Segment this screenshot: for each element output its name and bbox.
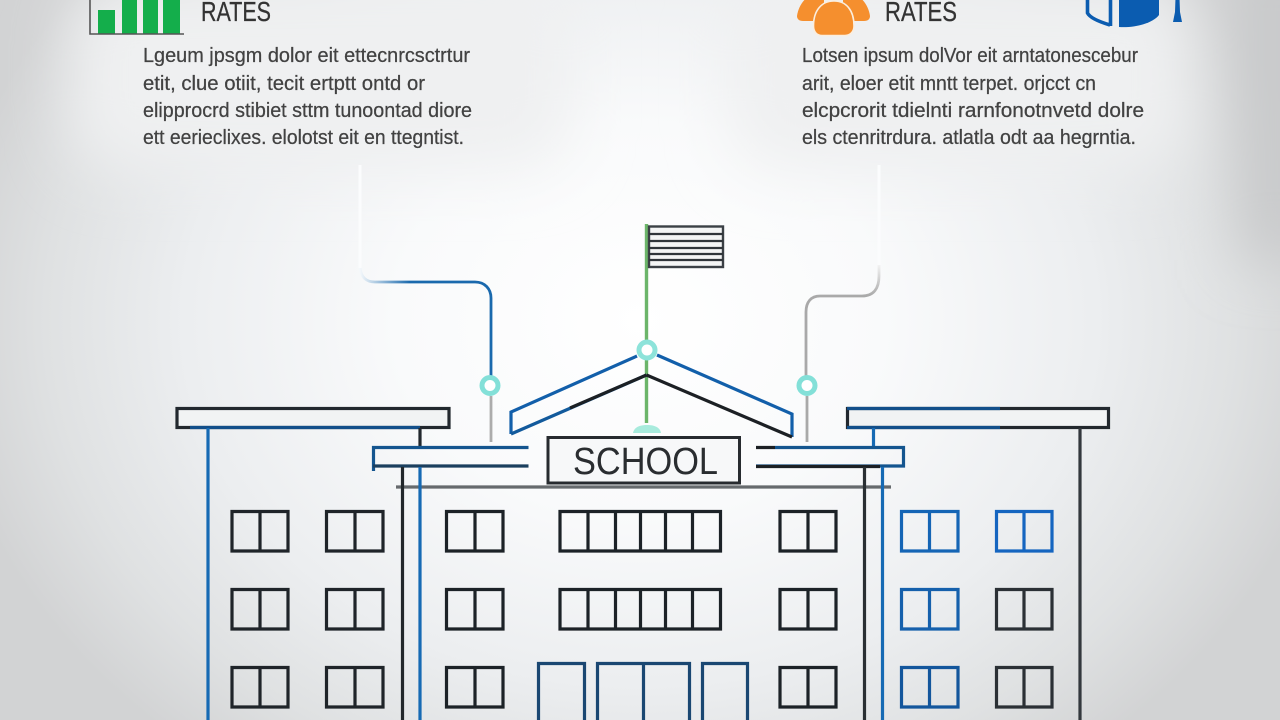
arrow: left connector line: [360, 165, 498, 442]
background glow behind text panels: [70, 0, 1280, 260]
windows: right wing: [902, 512, 1052, 707]
panel: left rates: [90, 0, 472, 149]
arrow: right connector line: [799, 165, 879, 442]
text block: left description: elipprocrd stibiet sttm tunoontad diore: [143, 100, 472, 122]
windows: central building: [446, 512, 836, 707]
icon: flag and pole: [633, 224, 723, 433]
right wing building: [847, 408, 1108, 720]
panel: right rates: [797, 0, 1182, 149]
sign: school: SCHOOL: [573, 441, 718, 483]
icon: orange people group: [797, 0, 870, 36]
text block: left description: ett eerieclixes. elolotst eit en ttegntist.: [143, 127, 464, 149]
icon: green bar chart: [90, 0, 184, 34]
text block: left description: Lgeum jpsgm dolor eit ettecnrcsctrtur: [143, 45, 470, 67]
icon: blue graduation cap: [1088, 0, 1182, 27]
roof: [511, 355, 792, 437]
text block: right description: arit, eloer etit mntt terpet. orjcct cn: [802, 73, 1096, 95]
text block: right description: elcpcrorit tdielnti rarnfonotnvetd dolre: [802, 100, 1144, 122]
text block: right description: Lotsen ipsum dolVor eit arntatonescebur: [802, 45, 1138, 67]
windows: left wing: [232, 512, 383, 707]
central building: [373, 438, 904, 720]
text block: right description: els ctenritrdura. atlatla odt aa hegrntia.: [802, 127, 1136, 149]
entrance doors: [538, 664, 748, 720]
text block: left description: [143, 45, 472, 149]
text block: right description: [802, 45, 1144, 149]
text block: left description: etit, clue otiit, tecit ertptt ontd or: [143, 73, 425, 95]
left wing building: [177, 408, 449, 720]
